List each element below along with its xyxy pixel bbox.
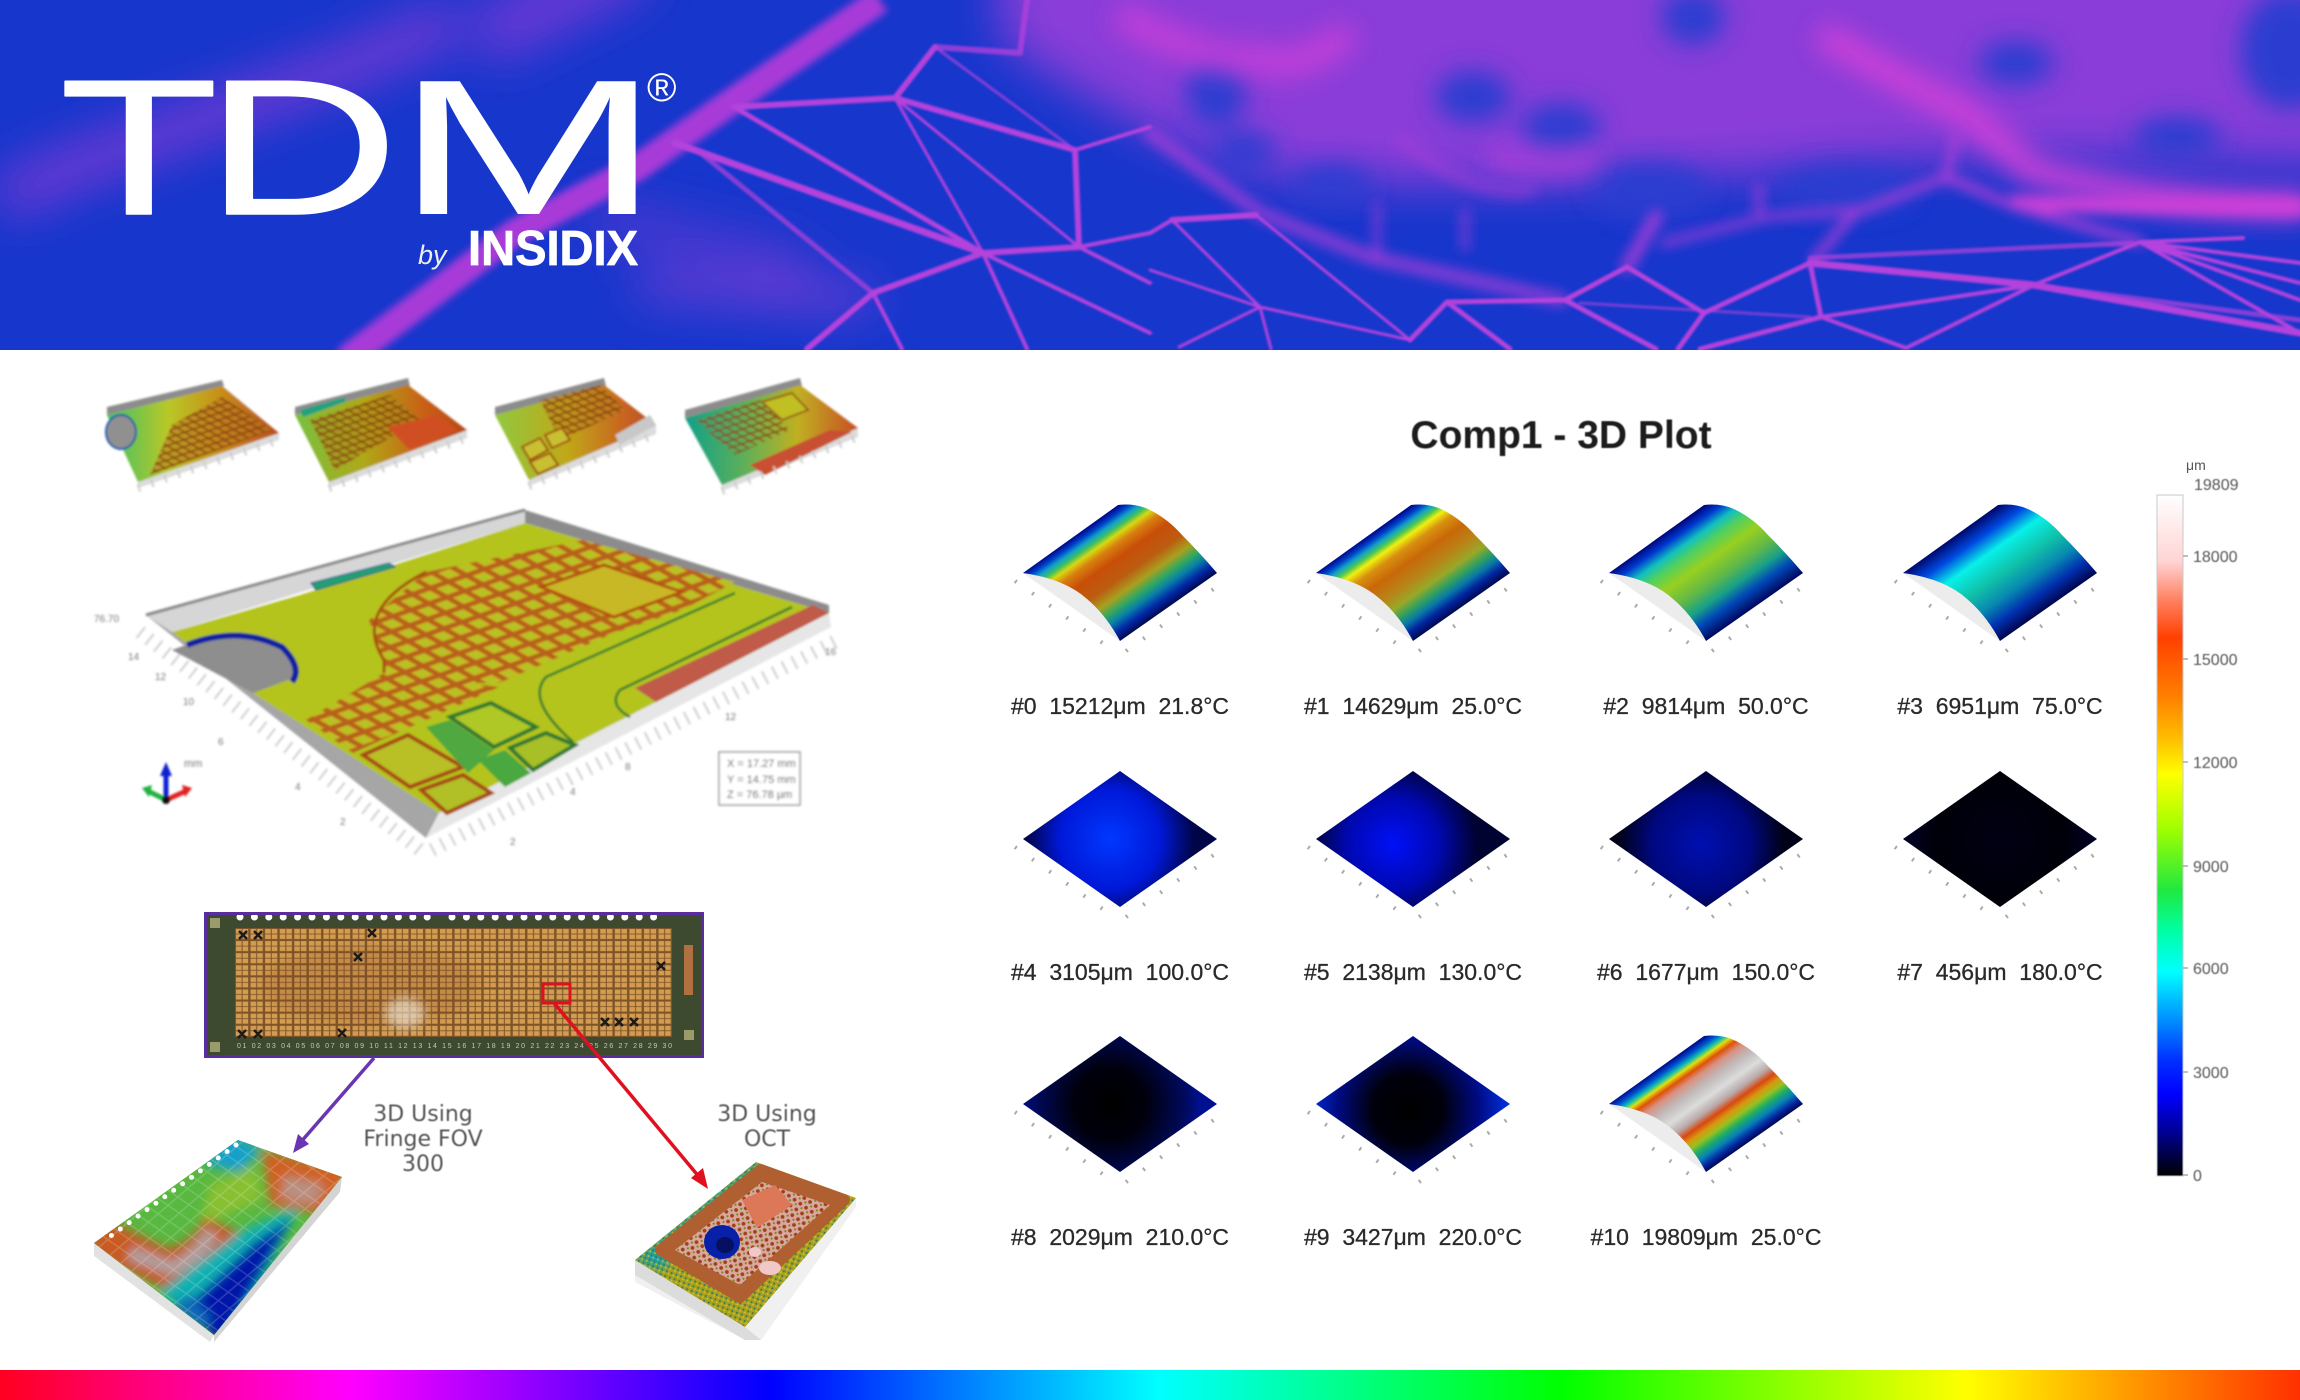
title: Comp1 - 3D Plot: [1410, 414, 1712, 457]
dimensions box: Y = 14.75 mm: [727, 774, 796, 786]
logo letter D: D: [205, 39, 399, 255]
chart: fringe 3D surface: [94, 1140, 342, 1342]
logo: TDM by INSIDIX: [60, 39, 676, 276]
plot #4: [1011, 771, 1229, 985]
axis triad: mm: [184, 758, 202, 770]
plot #0: #0 15212μm 21.8°C: [1011, 693, 1229, 719]
axis labels: [94, 614, 837, 848]
colour scale legend: [2157, 457, 2239, 1185]
circular cut-out: [172, 634, 297, 693]
plot #9: #9 3427μm 220.0°C: [1304, 1224, 1522, 1250]
dimensions box: Z = 76.78 µm: [727, 789, 792, 801]
scale labels: 12000: [2193, 755, 2238, 772]
plot #7: [1895, 771, 2105, 985]
scale labels: [2193, 477, 2239, 1185]
plot #1: [1304, 505, 1522, 719]
axis labels: 4: [570, 787, 576, 798]
plot #5: [1304, 771, 1522, 985]
scale labels: 18000: [2193, 549, 2238, 566]
scale labels: 3000: [2193, 1065, 2229, 1082]
axis labels: 2: [510, 837, 516, 848]
walls: [146, 510, 831, 838]
plot #2: #2 9814μm 50.0°C: [1603, 693, 1809, 719]
rainbow footer bar: [0, 1370, 2300, 1400]
axis labels: 8: [625, 762, 631, 773]
axis labels: 6: [218, 737, 224, 748]
registered mark: ®: [647, 66, 676, 110]
caption: fringe: 3D Using: [373, 1102, 473, 1127]
axis ticks: [140, 632, 838, 850]
plot #1: #1 14629μm 25.0°C: [1304, 693, 1522, 719]
logo letter M: M: [394, 40, 662, 255]
scale labels: 0: [2193, 1168, 2202, 1185]
plot #8: [1011, 1036, 1229, 1250]
banner: blue network background: [0, 0, 2300, 360]
axis labels: 12: [155, 672, 167, 683]
plot #9: [1304, 1036, 1522, 1250]
plot #3: [1895, 505, 2105, 719]
panel: PCB strip photograph: [204, 912, 703, 1057]
plot #10: #10 19809μm 25.0°C: [1591, 1224, 1821, 1250]
arrow: purple to fringe view: [293, 1058, 374, 1153]
scale labels: 19809: [2194, 477, 2239, 494]
unit: μm: [2186, 457, 2206, 473]
caption: fringe: [363, 1102, 483, 1177]
axis triad: [142, 758, 202, 804]
plot #0: [1011, 505, 1229, 719]
dimensions box: X = 17.27 mm: [727, 758, 796, 770]
plot #4: #4 3105μm 100.0°C: [1011, 959, 1229, 985]
axis labels: 76.70: [94, 614, 119, 625]
plot #8: #8 2029μm 210.0°C: [1011, 1224, 1229, 1250]
thumbnail 1: [106, 380, 279, 488]
caption: OCT: [717, 1102, 817, 1152]
lower tiles: [363, 703, 575, 813]
axis labels: 10: [183, 697, 195, 708]
plot #10: [1591, 1036, 1821, 1250]
component strip: [311, 563, 395, 590]
thumbnail 3: [495, 378, 656, 486]
INSIDIX wordmark: INSIDIX: [468, 222, 638, 276]
caption: fringe: Fringe FOV: [363, 1127, 483, 1152]
plot #7: #7 456μm 180.0°C: [1897, 959, 2103, 985]
plot #6: #6 1677μm 150.0°C: [1597, 959, 1815, 985]
scale labels: 15000: [2193, 652, 2238, 669]
plot #3: #3 6951μm 75.0°C: [1897, 693, 2103, 719]
column numbers: 01 02 03 04 05 06 07 08 09 10 11 12 13 14 15 16 17 18 19 20 21 22 23 24 25 26 27 28 29 30: [237, 1043, 672, 1050]
caption: OCT: 3D Using: [717, 1102, 817, 1127]
thumbnail 2: [295, 378, 467, 488]
thumbnail 4: [685, 378, 858, 491]
caption: fringe: 300: [402, 1152, 444, 1177]
gradient bar: [2157, 495, 2183, 1176]
axis labels: 14: [128, 652, 140, 663]
by label: by: [418, 240, 448, 270]
red inspection box: [543, 984, 570, 1003]
chart: OCT 3D surface: [635, 1162, 856, 1340]
axis labels: 16: [825, 647, 837, 658]
pad matrix: [235, 928, 672, 1037]
plot #2: [1601, 505, 1811, 719]
mounting holes: [240, 914, 662, 920]
traces: [374, 572, 792, 742]
copper plane: [172, 523, 829, 813]
red edge connector: [635, 605, 829, 702]
brown tint: [260, 945, 480, 1025]
reject marks: [238, 929, 665, 1038]
scale labels: 6000: [2193, 961, 2229, 978]
central chip: [541, 565, 682, 617]
trace grid: [306, 540, 735, 753]
logo letter T: T: [60, 40, 218, 255]
scale labels: 9000: [2193, 859, 2229, 876]
arrow: red to OCT view: [554, 1003, 708, 1189]
panel: warpage thumbnails: [106, 378, 858, 491]
corner fiducials: [210, 918, 694, 1052]
axis labels: 12: [725, 712, 737, 723]
plot #6: [1597, 771, 1815, 985]
axis labels: 2: [340, 817, 346, 828]
white residue: [385, 998, 425, 1028]
caption: OCT: OCT: [744, 1127, 791, 1152]
purple frame: [206, 914, 702, 1056]
chart: main 3D PCB surface: [94, 510, 838, 850]
dimensions box: [719, 752, 800, 805]
axis labels: 4: [295, 782, 301, 793]
scale ticks: [2183, 556, 2188, 1175]
plot #5: #5 2138μm 130.0°C: [1304, 959, 1522, 985]
